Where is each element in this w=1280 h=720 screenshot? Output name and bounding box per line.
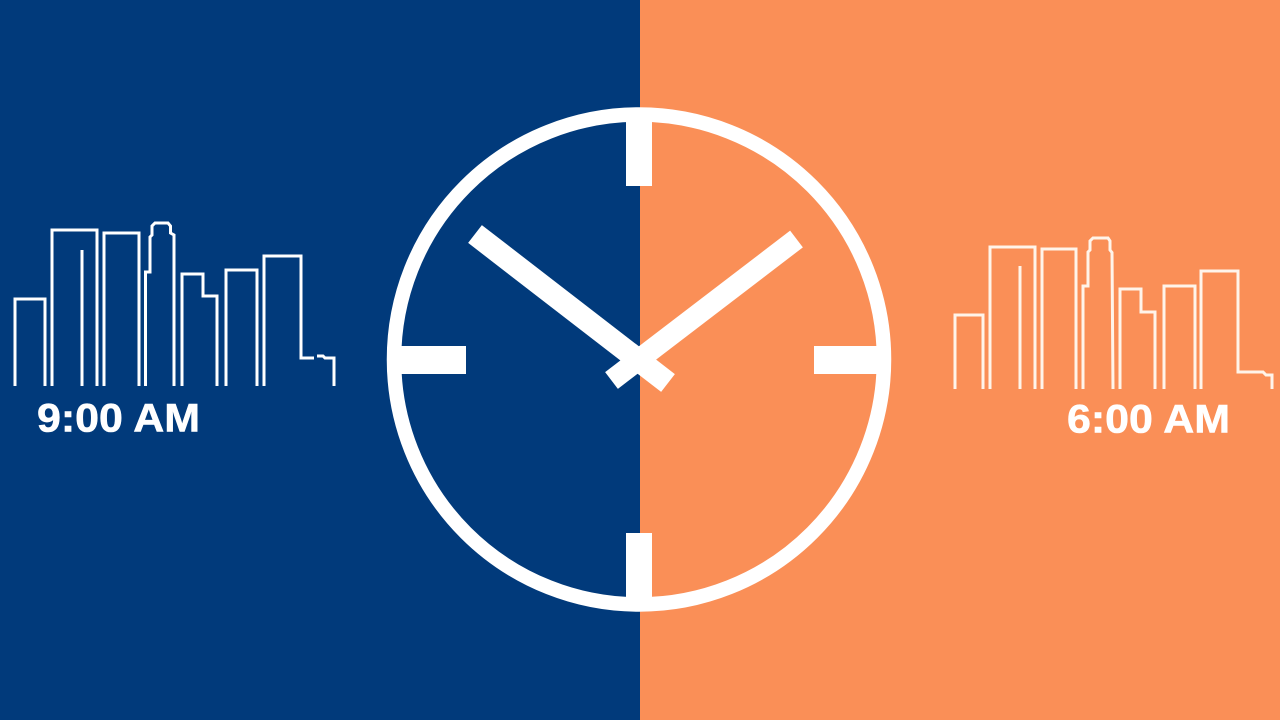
label: left time: 9:00 AM <box>37 396 200 440</box>
clock hand: right <box>612 239 796 380</box>
clock ring <box>394 114 884 604</box>
icon: clock <box>394 114 884 604</box>
panel: navy left background <box>0 0 640 720</box>
tick: 3 o'clock <box>814 346 882 374</box>
tick: 6 o'clock <box>626 533 652 601</box>
icon: left city skyline <box>15 223 334 386</box>
icon: right city skyline <box>955 238 1272 389</box>
panel: orange right background <box>640 0 1280 720</box>
tick: 9 o'clock <box>398 346 466 374</box>
label: right time: 6:00 AM <box>1067 398 1230 442</box>
clock hand: left <box>475 234 668 383</box>
tick: 12 o'clock <box>626 118 652 186</box>
